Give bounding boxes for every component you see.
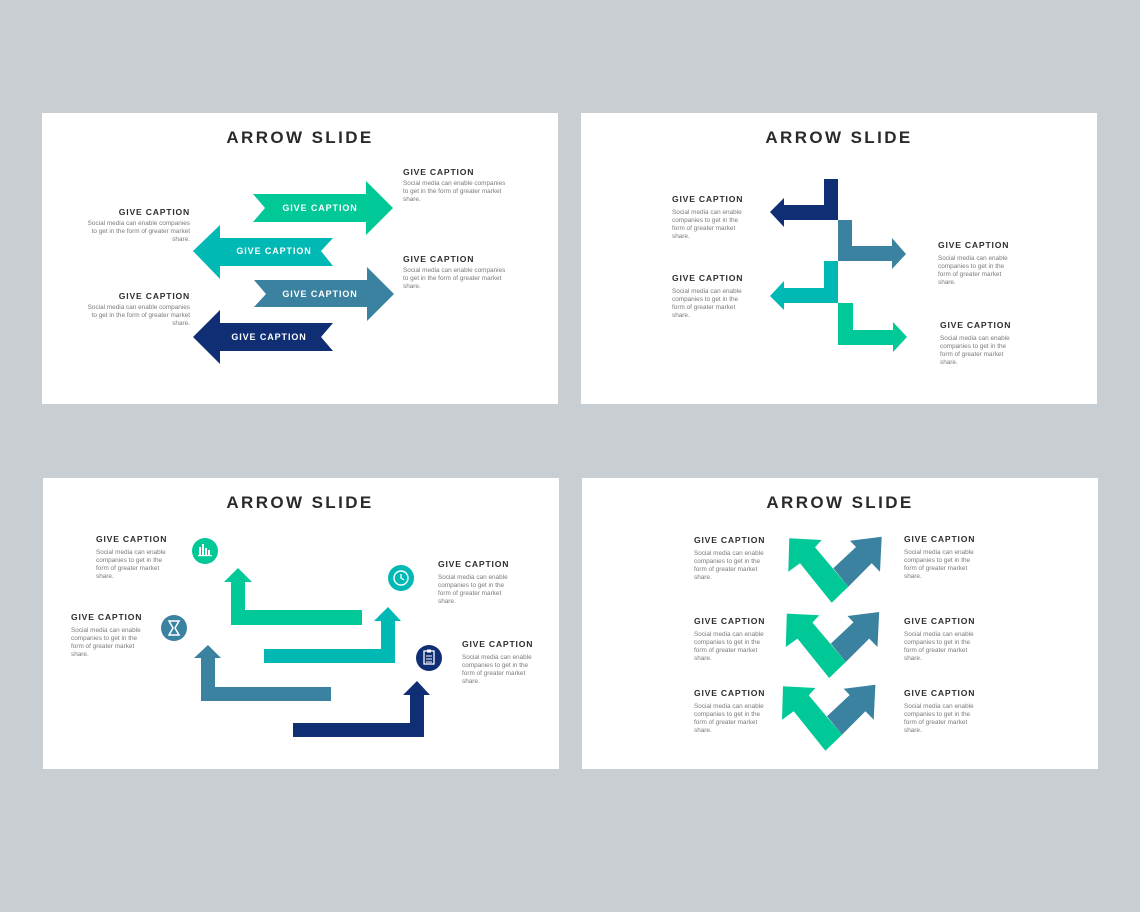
caption: right top: GIVE CAPTION <box>403 167 474 177</box>
caption: left top: share. <box>672 233 690 240</box>
caption: right top: GIVE CAPTION <box>938 240 1009 250</box>
panel: slide 2 stepped arrows <box>581 113 1097 404</box>
caption: left row 3 <box>694 688 765 734</box>
caption: top right: companies to get in the <box>438 582 505 589</box>
arrow: green right <box>253 181 393 235</box>
caption: right row 3 <box>904 688 975 734</box>
caption: right row 1: Social media can enable <box>904 549 974 556</box>
caption: left bottom: companies to get in the <box>672 296 739 303</box>
caption: mid left: Social media can enable <box>71 627 141 634</box>
arrow: steel up <box>194 645 331 701</box>
caption: mid left: share. <box>71 651 89 658</box>
arrow: teal left: GIVE CAPTION <box>236 246 312 256</box>
caption: bottom right: companies to get in the <box>462 662 529 669</box>
caption: mid left: companies to get in the <box>71 635 138 642</box>
arrow: green right: GIVE CAPTION <box>282 203 358 213</box>
arrow: navy left: GIVE CAPTION <box>231 332 307 342</box>
chevron arrows row 2 <box>786 612 879 678</box>
caption: left row 2 <box>694 616 765 662</box>
caption: left row 2: GIVE CAPTION <box>694 616 765 626</box>
arrow: navy elbow left <box>770 179 838 227</box>
arrow: green elbow right <box>838 303 907 352</box>
caption: right row 2: GIVE CAPTION <box>904 616 975 626</box>
caption: left top: share. <box>172 236 190 243</box>
caption: left bottom: GIVE CAPTION <box>672 273 743 283</box>
caption: left top <box>88 207 190 243</box>
icon: bar chart <box>192 538 218 564</box>
arrow: teal left <box>193 225 333 279</box>
arrow: steel right <box>254 267 394 321</box>
caption: right top: Social media can enable <box>938 255 1008 262</box>
caption: top left: form of greater market <box>96 565 159 572</box>
caption: right top: share. <box>938 279 956 286</box>
panel: slide 1 horizontal arrows <box>42 113 558 404</box>
chevron arrows row 3 <box>782 685 875 751</box>
caption: left row 2: form of greater market <box>694 647 757 654</box>
caption: right row 3: companies to get in the <box>904 711 971 718</box>
caption: left row 2: share. <box>694 655 712 662</box>
caption: left top: form of greater market <box>672 225 735 232</box>
caption: left top: to get in the form of greater market <box>92 228 190 235</box>
caption: left bottom: Social media can enable companies <box>88 304 190 311</box>
caption: mid left <box>71 612 142 658</box>
arrow: teal up <box>264 607 401 663</box>
caption: left top: Social media can enable companies <box>88 220 190 227</box>
caption: right row 2: form of greater market <box>904 647 967 654</box>
caption: right bottom <box>940 320 1011 366</box>
caption: right top: share. <box>403 196 421 203</box>
caption: right bottom: share. <box>940 359 958 366</box>
caption: left row 1: GIVE CAPTION <box>694 535 765 545</box>
caption: left bottom: form of greater market <box>672 304 735 311</box>
caption: right bottom: form of greater market <box>940 351 1003 358</box>
caption: left bottom: GIVE CAPTION <box>119 291 190 301</box>
caption: top left: Social media can enable <box>96 549 166 556</box>
caption: left row 1: share. <box>694 574 712 581</box>
caption: left row 1: form of greater market <box>694 566 757 573</box>
caption: right bottom: GIVE CAPTION <box>940 320 1011 330</box>
caption: right row 1 <box>904 534 975 580</box>
caption: top left: share. <box>96 573 114 580</box>
icon: hourglass <box>161 615 187 641</box>
caption: right bottom: to get in the form of greater market <box>403 275 502 282</box>
caption: right row 1: share. <box>904 573 922 580</box>
caption: right row 3: form of greater market <box>904 719 967 726</box>
caption: top right <box>438 559 509 605</box>
caption: right top: form of greater market <box>938 271 1001 278</box>
panel: slide 3 up arrows with icons <box>43 478 559 769</box>
caption: right top <box>403 167 505 203</box>
icon: clipboard <box>416 645 442 671</box>
arrow: navy left <box>193 310 333 364</box>
caption: bottom right <box>462 639 533 685</box>
caption: left bottom: share. <box>672 312 690 319</box>
caption: right row 3: GIVE CAPTION <box>904 688 975 698</box>
caption: right row 3: share. <box>904 727 922 734</box>
chevron arrows row 1 <box>788 537 882 603</box>
caption: top right: Social media can enable <box>438 574 508 581</box>
caption: left top: GIVE CAPTION <box>119 207 190 217</box>
caption: top right: GIVE CAPTION <box>438 559 509 569</box>
title 4: ARROW SLIDE <box>766 493 914 512</box>
caption: left row 3: share. <box>694 727 712 734</box>
caption: right row 1: companies to get in the <box>904 557 971 564</box>
caption: left row 3: form of greater market <box>694 719 757 726</box>
caption: right bottom: Social media can enable <box>940 335 1010 342</box>
caption: left row 2: companies to get in the <box>694 639 761 646</box>
caption: top right: share. <box>438 598 456 605</box>
caption: right row 1: form of greater market <box>904 565 967 572</box>
caption: left row 1: companies to get in the <box>694 558 761 565</box>
caption: right bottom: Social media can enable companies <box>403 267 505 274</box>
icon: clock <box>388 565 414 591</box>
caption: right bottom <box>403 254 505 290</box>
caption: right row 2 <box>904 616 975 662</box>
caption: left bottom <box>672 273 743 319</box>
caption: right row 2: Social media can enable <box>904 631 974 638</box>
caption: bottom right: Social media can enable <box>462 654 532 661</box>
caption: right row 2: share. <box>904 655 922 662</box>
arrow: green up <box>224 568 362 625</box>
caption: left top <box>672 194 743 240</box>
caption: right top: to get in the form of greater market <box>403 188 502 195</box>
arrow: steel right: GIVE CAPTION <box>282 289 358 299</box>
caption: right bottom: companies to get in the <box>940 343 1007 350</box>
caption: left row 2: Social media can enable <box>694 631 764 638</box>
caption: left top: companies to get in the <box>672 217 739 224</box>
caption: right top <box>938 240 1009 286</box>
caption: left row 3: Social media can enable <box>694 703 764 710</box>
caption: right row 2: companies to get in the <box>904 639 971 646</box>
title 1: ARROW SLIDE <box>226 128 374 147</box>
caption: bottom right: form of greater market <box>462 670 525 677</box>
caption: left bottom <box>88 291 190 327</box>
arrow: steel elbow right <box>838 220 906 269</box>
caption: bottom right: GIVE CAPTION <box>462 639 533 649</box>
caption: left row 1: Social media can enable <box>694 550 764 557</box>
caption: right bottom: share. <box>403 283 421 290</box>
caption: left top: GIVE CAPTION <box>672 194 743 204</box>
arrow: teal elbow left <box>770 261 838 310</box>
caption: left top: Social media can enable <box>672 209 742 216</box>
caption: left bottom: Social media can enable <box>672 288 742 295</box>
caption: right bottom: GIVE CAPTION <box>403 254 474 264</box>
caption: left bottom: to get in the form of greater market <box>92 312 190 319</box>
caption: top left <box>96 534 167 580</box>
caption: left row 1 <box>694 535 765 581</box>
arrow: navy up <box>293 681 430 737</box>
caption: left row 3: GIVE CAPTION <box>694 688 765 698</box>
caption: right row 3: Social media can enable <box>904 703 974 710</box>
caption: top right: form of greater market <box>438 590 501 597</box>
title 2: ARROW SLIDE <box>765 128 913 147</box>
title 3: ARROW SLIDE <box>226 493 374 512</box>
caption: mid left: form of greater market <box>71 643 134 650</box>
caption: top left: companies to get in the <box>96 557 163 564</box>
caption: right top: Social media can enable companies <box>403 180 505 187</box>
caption: right top: companies to get in the <box>938 263 1005 270</box>
panel: slide 4 chevron arrows <box>582 478 1098 769</box>
caption: mid left: GIVE CAPTION <box>71 612 142 622</box>
caption: left bottom: share. <box>172 320 190 327</box>
caption: right row 1: GIVE CAPTION <box>904 534 975 544</box>
caption: top left: GIVE CAPTION <box>96 534 167 544</box>
caption: left row 3: companies to get in the <box>694 711 761 718</box>
caption: bottom right: share. <box>462 678 480 685</box>
